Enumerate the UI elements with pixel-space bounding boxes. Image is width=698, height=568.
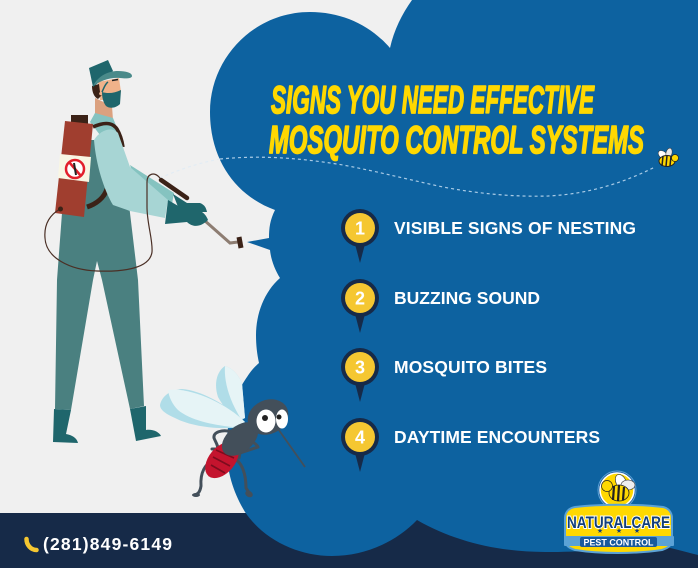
proboscis	[276, 426, 305, 467]
legs	[195, 431, 258, 495]
illustration: mosquito	[160, 366, 305, 499]
wing back	[216, 366, 245, 421]
list item 4	[341, 418, 600, 472]
illustration: exterminator	[45, 60, 241, 443]
list item 2: 2	[355, 288, 365, 308]
gloves	[173, 194, 207, 212]
mask	[102, 90, 121, 108]
logo bee emblem	[598, 471, 636, 509]
phone number: (281)849-6149	[43, 534, 172, 554]
logo: NaturalCare Pest Control	[564, 471, 674, 553]
list item 2	[341, 279, 540, 333]
title	[269, 79, 644, 162]
list item 1: 1	[355, 218, 365, 238]
logo stars: ★	[616, 527, 622, 535]
neck	[95, 98, 113, 120]
flight path dashed line	[160, 157, 655, 196]
logo banner	[564, 536, 674, 546]
list item 3: MOSQUITO BITES	[394, 357, 547, 377]
sprayer wand	[204, 220, 241, 248]
front arm	[94, 129, 168, 218]
thorax	[216, 416, 264, 462]
list: signs	[341, 209, 636, 472]
hose	[45, 174, 160, 271]
logo badge	[565, 505, 672, 553]
list item 3	[341, 348, 547, 402]
logo wordmark: NATURALCARE	[567, 513, 670, 532]
icon: small bee	[657, 147, 678, 166]
list item 3: 3	[355, 358, 365, 378]
eyes	[256, 410, 276, 432]
icon: phone	[26, 539, 36, 550]
eye	[112, 80, 118, 81]
abdomen	[199, 436, 245, 484]
overalls	[55, 140, 144, 410]
list item 4: 4	[355, 428, 365, 448]
sprayer handle	[161, 180, 187, 198]
shirt collar	[90, 113, 122, 140]
hair	[92, 84, 102, 99]
spray tank	[55, 115, 93, 217]
back arm	[130, 165, 174, 204]
cap	[89, 60, 113, 87]
panel: blue cloud background	[210, 0, 698, 556]
list item 4: DAYTIME ENCOUNTERS	[394, 427, 600, 447]
list item 1: VISIBLE SIGNS OF NESTING	[394, 218, 636, 238]
logo stars: ★	[634, 527, 640, 535]
footer bar	[0, 513, 698, 568]
logo: NaturalCare Pest Control: PEST CONTROL	[584, 538, 654, 548]
logo stars	[597, 527, 640, 535]
list item 1	[341, 209, 636, 263]
straps	[87, 123, 123, 207]
head	[242, 393, 294, 441]
face	[98, 78, 121, 100]
logo stars: ★	[597, 527, 603, 535]
list item 2: BUZZING SOUND	[394, 288, 540, 308]
boots	[53, 406, 161, 443]
wing front	[160, 389, 245, 428]
